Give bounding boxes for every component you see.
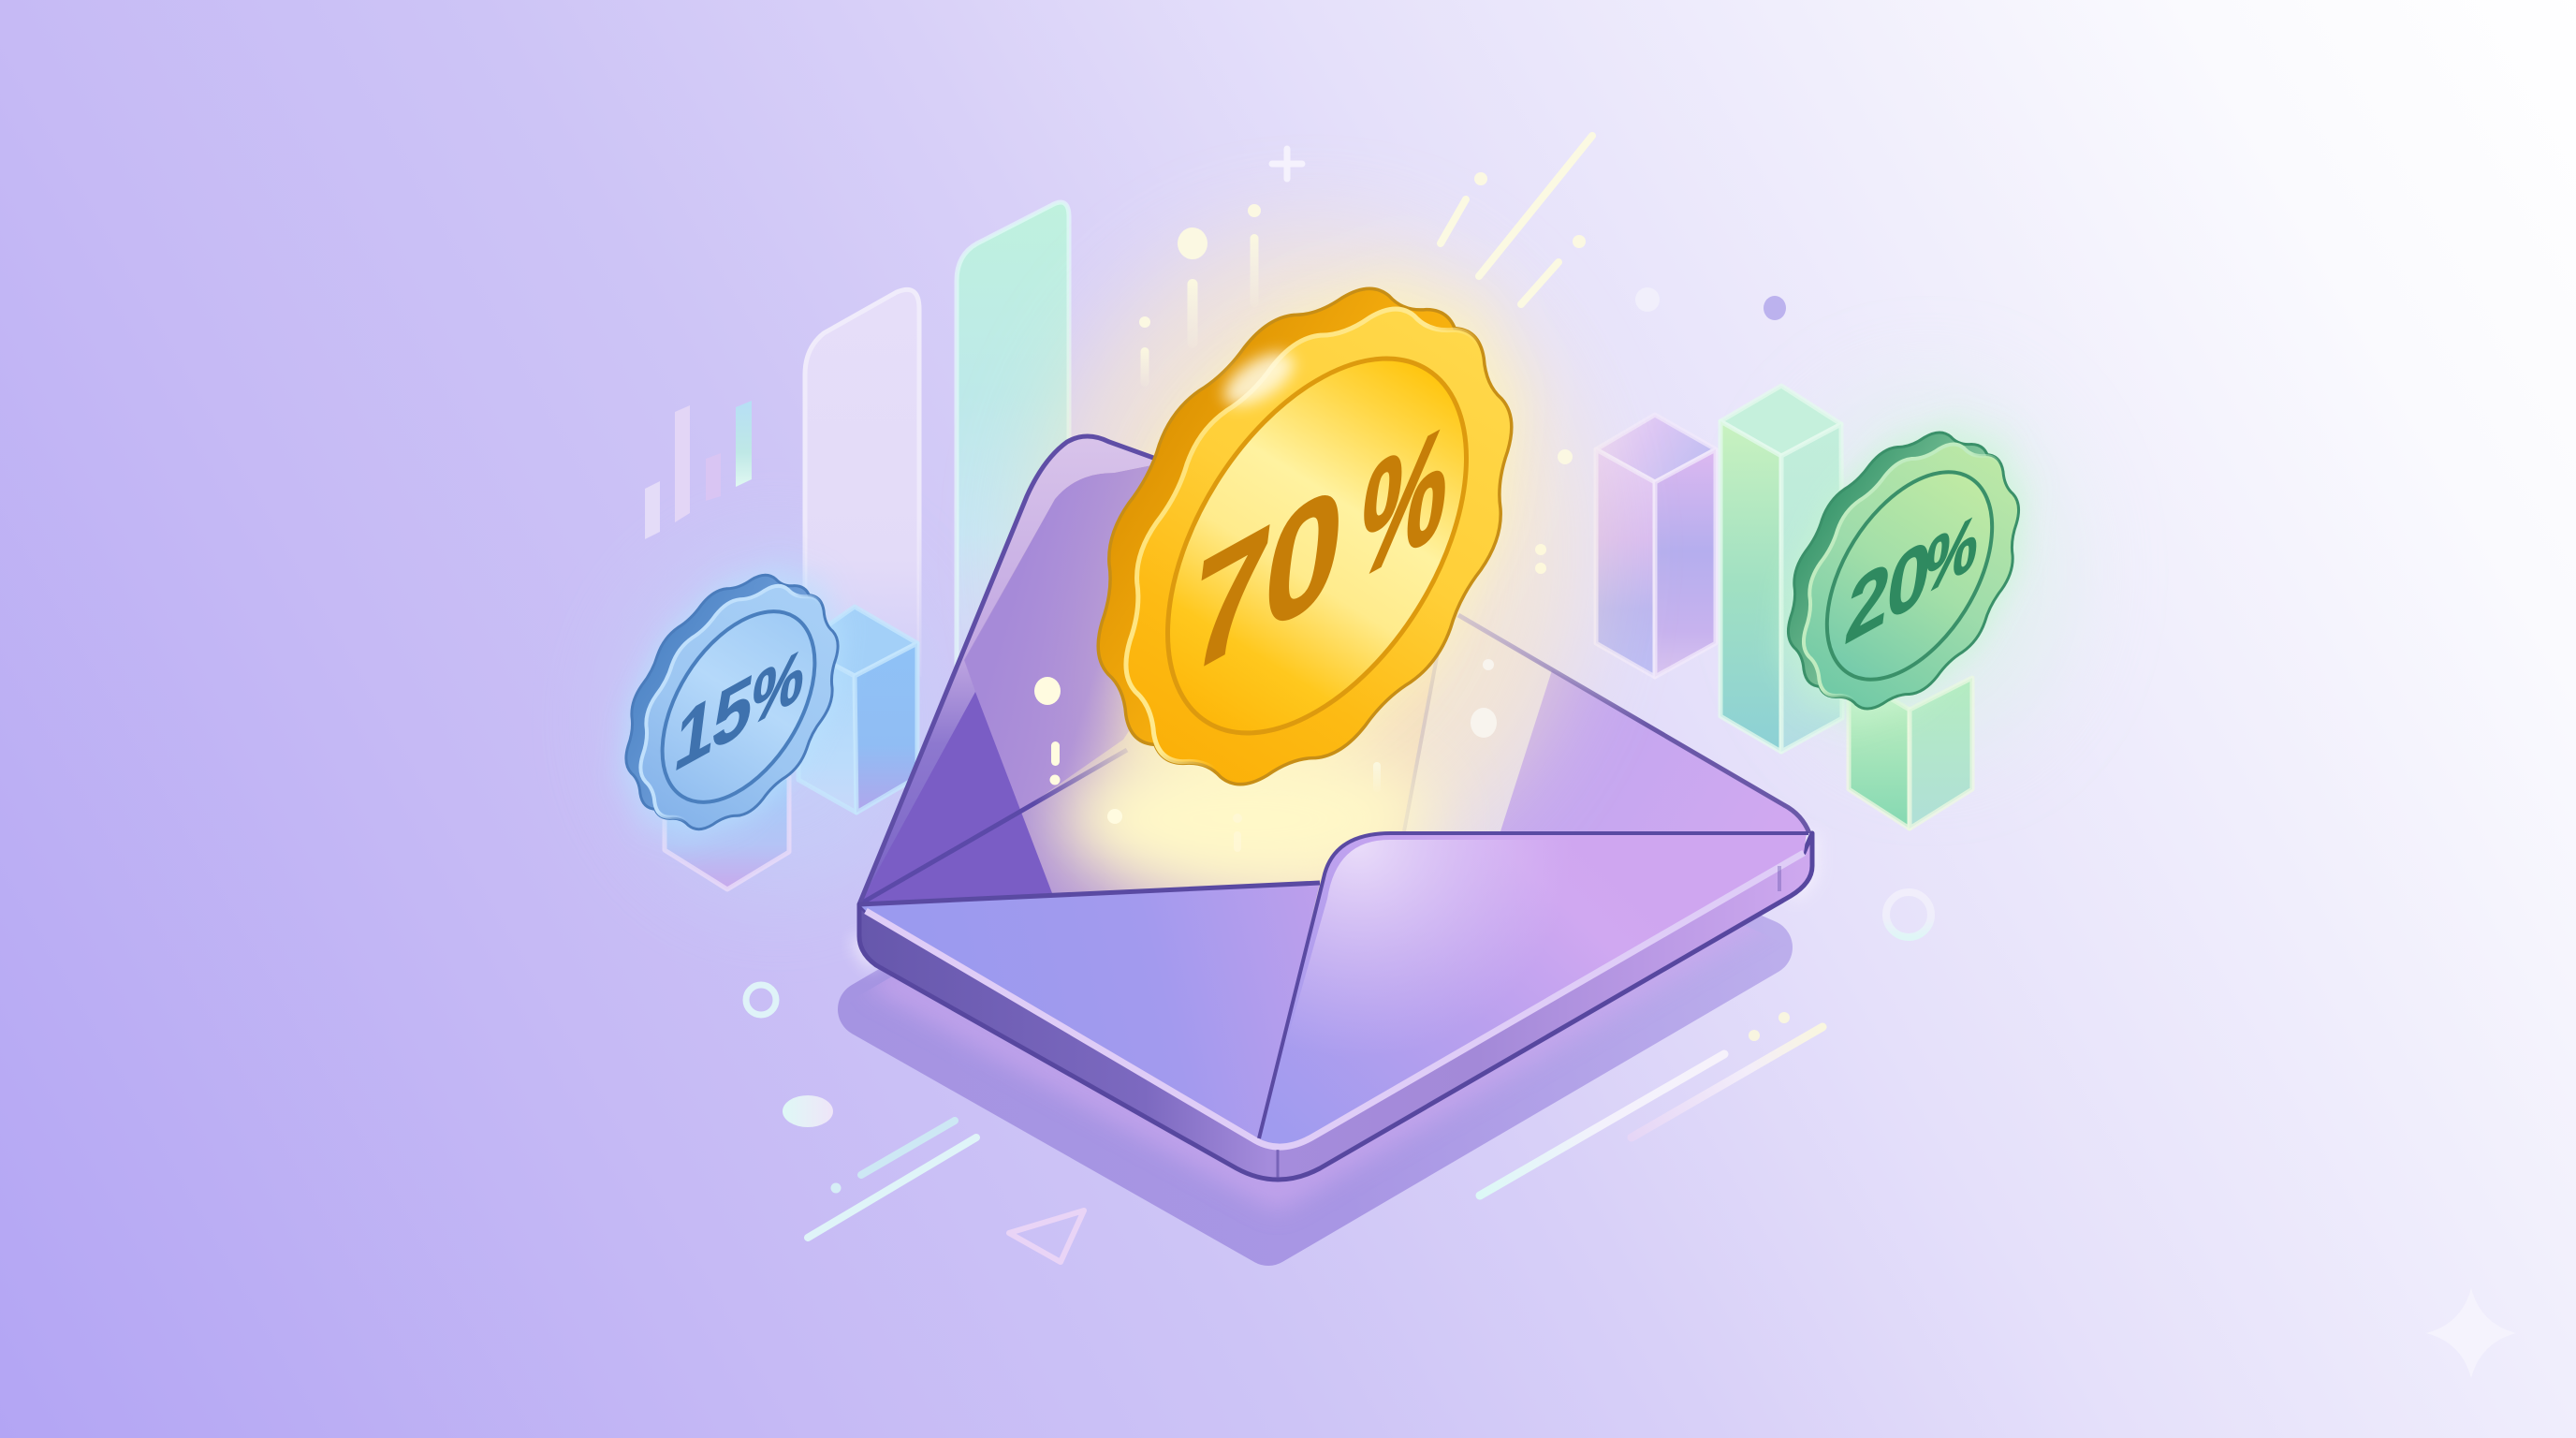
coin 20 glow	[1736, 385, 2073, 757]
decor oval	[783, 1095, 833, 1127]
decor large ring	[1886, 892, 1931, 937]
coin 20 inner ring	[1793, 444, 2027, 708]
right tall green isometric bar	[1720, 386, 1842, 752]
blue coin 15% badge	[578, 533, 886, 872]
decor triangle	[1009, 1211, 1084, 1262]
coin 70 percent sign: %	[1351, 389, 1458, 615]
coin 20 front face	[1760, 407, 2061, 744]
envelope interior base	[859, 436, 1809, 904]
decor dot	[831, 1183, 841, 1193]
mini bar 3	[706, 453, 721, 501]
right translucent strip	[1404, 615, 1552, 831]
coin 15 percent sign: %	[747, 632, 810, 742]
coin 15 extruded back	[587, 543, 864, 852]
coin 15 digits: 15	[670, 656, 757, 790]
coin 70 extruded back	[1021, 224, 1562, 830]
decor line far	[1632, 1027, 1822, 1137]
coin 70 front face	[1047, 242, 1588, 849]
coin 20 extruded back	[1746, 397, 2047, 734]
lower-left decorations	[746, 985, 1084, 1262]
coin 70 digits: 70	[1180, 448, 1351, 711]
coin 20 back fill	[1746, 397, 2047, 734]
decor dot right	[1778, 1012, 1790, 1023]
envelope ground shadow	[838, 882, 1793, 1266]
decor long line	[808, 1137, 976, 1238]
side dots: pale and violet	[1635, 287, 1786, 320]
inner panel seam	[1404, 642, 1440, 831]
gold coin 70% badge	[1021, 224, 1588, 849]
green coin 20% badge	[1736, 385, 2073, 757]
flap purple tint over halo	[965, 463, 1179, 814]
coin 70 back fill	[1021, 224, 1562, 830]
coin 15 back fill	[587, 543, 864, 852]
coin 20 percent sign: %	[1920, 496, 1983, 612]
coin 70 inner ring	[1106, 306, 1528, 785]
envelope outer white glow	[859, 833, 1812, 965]
interior diagonal crease	[859, 750, 1127, 904]
decor short line	[861, 1121, 955, 1175]
envelope front edge highlight	[866, 853, 1804, 1147]
envelope dark interior triangle	[859, 692, 1052, 904]
coin 15 front stroke	[600, 552, 877, 861]
envelope outlines	[859, 833, 1808, 1180]
coin 15 front face	[600, 552, 877, 861]
coin 15 inner ring	[631, 585, 846, 829]
plus sparkle	[1272, 149, 1302, 179]
left blue isometric bar	[798, 607, 917, 813]
sparks inside envelope	[1034, 544, 1546, 852]
ghost bar: mint glass panel	[957, 202, 1069, 674]
right purple isometric bar	[1596, 415, 1716, 677]
coin 20 digits: 20	[1840, 520, 1935, 665]
ambient glow: green right of envelope	[1788, 393, 2069, 749]
front flap corner highlight	[1259, 840, 1807, 1145]
gold coin halo	[1015, 217, 1597, 899]
coin 15 glow	[578, 533, 886, 872]
ghost bar: white glass panel	[805, 289, 919, 674]
mini bar 2	[675, 405, 690, 522]
rising sparks above coin	[1139, 136, 1592, 464]
flap outer edge line	[859, 436, 1156, 904]
envelope back and interior	[859, 436, 1809, 904]
coin 70 glint	[1216, 343, 1302, 416]
right inner panel	[1404, 615, 1809, 833]
ghost bars behind envelope	[645, 202, 1069, 674]
envelope side thickness	[859, 833, 1812, 1180]
envelope flap rim band	[859, 436, 1161, 904]
mini bar 4	[736, 401, 752, 487]
envelope front left pocket	[859, 883, 1320, 1138]
decor dot left	[1749, 1030, 1760, 1041]
mini bar 1	[645, 481, 660, 539]
decor line near	[1480, 1054, 1724, 1196]
right short green isometric bar	[1849, 674, 1972, 829]
corner four-point sparkle	[2426, 1288, 2516, 1378]
coin 20 front stroke	[1760, 407, 2061, 744]
right back edge line	[1458, 615, 1809, 833]
left lower blue isometric bar	[665, 777, 789, 889]
lower-right decorations	[1480, 892, 1931, 1196]
envelope front right flap	[1259, 833, 1807, 1145]
decor ring	[746, 985, 776, 1015]
ambient glow: blue left of envelope	[618, 543, 936, 899]
coin 70 front stroke	[1047, 242, 1588, 849]
